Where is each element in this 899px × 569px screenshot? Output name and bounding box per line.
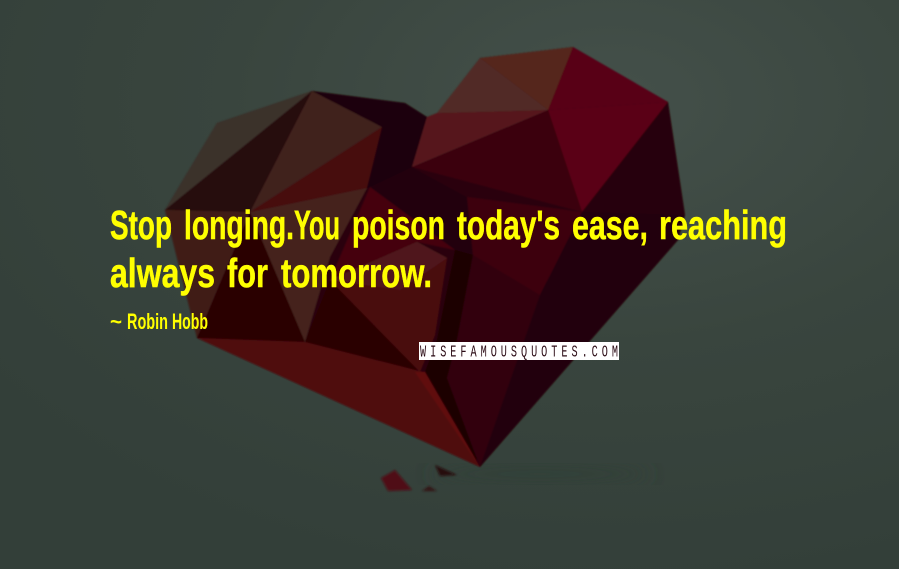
quote line 1: today's xyxy=(457,202,560,248)
heart base silhouette xyxy=(165,47,685,467)
polygon heart xyxy=(165,47,685,467)
quote line 1: Stop xyxy=(110,202,172,248)
quote line 1: poison xyxy=(352,202,445,248)
quote line 1: reaching xyxy=(659,202,787,248)
quote line 1: longing. xyxy=(184,202,294,248)
quote line 2: for xyxy=(227,250,268,296)
right lobe facets xyxy=(412,47,685,467)
watermark: WISEFAMOUSQUOTES.COM xyxy=(420,343,618,363)
quote line 1: You xyxy=(294,202,340,248)
quote line 2: tomorrow. xyxy=(281,250,432,296)
author attribution xyxy=(110,309,208,334)
small shard xyxy=(422,486,437,491)
quote line 2 xyxy=(110,250,432,296)
quote text xyxy=(110,202,787,296)
author attribution: ~ xyxy=(110,309,122,334)
shadow under heart xyxy=(430,465,650,483)
left lobe facets xyxy=(165,91,382,342)
large shard xyxy=(381,470,412,491)
quote line 1: ease, xyxy=(572,202,648,248)
broken shards xyxy=(381,465,457,491)
quote line 2: always xyxy=(110,250,215,296)
author attribution: Hobb xyxy=(172,309,208,334)
flat shard xyxy=(435,465,457,476)
quote line 1 xyxy=(110,202,787,248)
centre facets xyxy=(197,91,480,467)
author attribution: Robin xyxy=(127,309,168,334)
